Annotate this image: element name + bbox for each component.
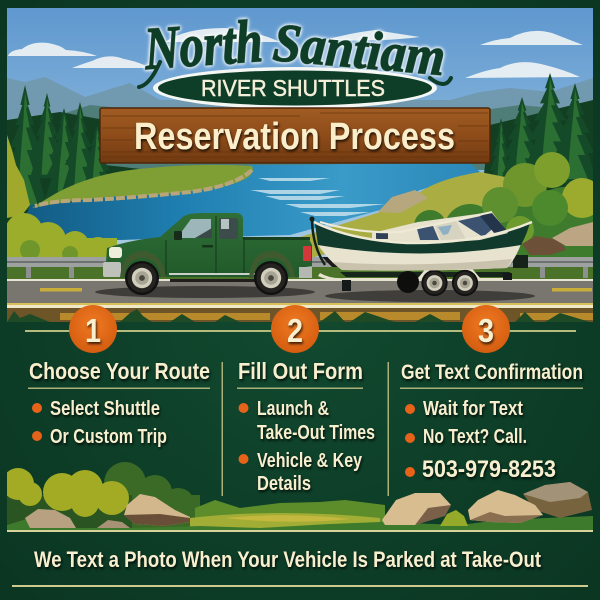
badge text: RIVER SHUTTLES xyxy=(201,75,385,101)
boulder xyxy=(468,490,543,523)
right bushes xyxy=(414,152,600,263)
step 1 list: Select Shuttle xyxy=(50,398,160,420)
divider: bottom of landscape xyxy=(7,530,593,532)
boulder xyxy=(124,494,190,526)
truck details xyxy=(202,245,213,248)
boulder xyxy=(382,493,451,525)
grass verge xyxy=(7,267,593,279)
guard rail xyxy=(7,257,593,278)
script name: North: North xyxy=(142,8,265,82)
cabin xyxy=(372,212,508,242)
panel: step 3 xyxy=(400,361,583,483)
step 3 list xyxy=(405,398,556,483)
boulder xyxy=(25,509,76,528)
step badge 3 xyxy=(462,305,510,353)
truck body xyxy=(103,213,312,277)
ground strip with grass xyxy=(7,308,593,322)
clouds xyxy=(8,28,583,78)
phone number: 503-979-8253 xyxy=(422,456,556,483)
logo glow xyxy=(153,67,437,109)
yellow bushes xyxy=(2,468,129,517)
step 2 list: Launch & xyxy=(257,398,329,420)
panel: step 1 xyxy=(28,358,210,448)
right boulders xyxy=(522,222,593,255)
oval badge xyxy=(158,70,432,106)
divider: step rail xyxy=(25,330,576,332)
tree mass right xyxy=(484,100,593,190)
step 1 list: Or Custom Trip xyxy=(50,426,167,448)
script swash xyxy=(139,62,451,87)
step badge 2: 2 xyxy=(287,312,303,349)
gunwale xyxy=(314,222,532,243)
left river bank xyxy=(32,165,253,208)
river xyxy=(20,163,480,240)
trailer xyxy=(340,272,510,277)
illustration: pickup truck xyxy=(103,213,312,295)
step badge 2 xyxy=(271,305,319,353)
boulder xyxy=(97,520,130,528)
brand logo xyxy=(139,8,451,109)
step 3 list: No Text? Call. xyxy=(423,426,527,448)
step badge 1: 1 xyxy=(85,312,101,349)
divider: footer rule xyxy=(12,585,588,587)
column divider xyxy=(222,362,223,496)
dark bushes xyxy=(100,462,200,528)
truck windows xyxy=(182,219,211,238)
step badge 1 xyxy=(69,305,117,353)
yellow shrub left edge xyxy=(7,135,30,218)
sign title: Reservation Process xyxy=(134,116,455,158)
step 2 list: Vehicle & Key xyxy=(257,450,363,472)
low hedge xyxy=(195,500,385,525)
left bushes xyxy=(7,213,117,257)
step 2 list: Details xyxy=(257,473,311,495)
step 2 heading: Fill Out Form xyxy=(238,358,363,384)
illustration: foreground bushes and boulders xyxy=(2,462,593,530)
illustration: drift boat on trailer xyxy=(310,212,532,296)
panel: step 2 xyxy=(237,358,375,495)
column divider xyxy=(388,362,389,496)
mountains xyxy=(7,77,593,120)
script name: Santiam: Santiam xyxy=(271,12,448,87)
road xyxy=(7,279,593,308)
step 2 list: Take-Out Times xyxy=(257,422,375,444)
hull xyxy=(318,244,521,271)
boulder xyxy=(523,482,592,518)
step badge 3: 3 xyxy=(478,312,494,349)
tree mass left xyxy=(7,112,150,225)
step 1 heading: Choose Your Route xyxy=(29,358,210,384)
step 2 list xyxy=(238,398,375,495)
wooden sign xyxy=(100,108,490,163)
meadow xyxy=(190,513,380,528)
step 1 list xyxy=(32,398,167,448)
panel: landscape scene xyxy=(2,8,600,322)
step 3 list: Wait for Text xyxy=(423,398,523,420)
tow hitch strap xyxy=(312,218,325,265)
right river bank xyxy=(300,172,504,257)
